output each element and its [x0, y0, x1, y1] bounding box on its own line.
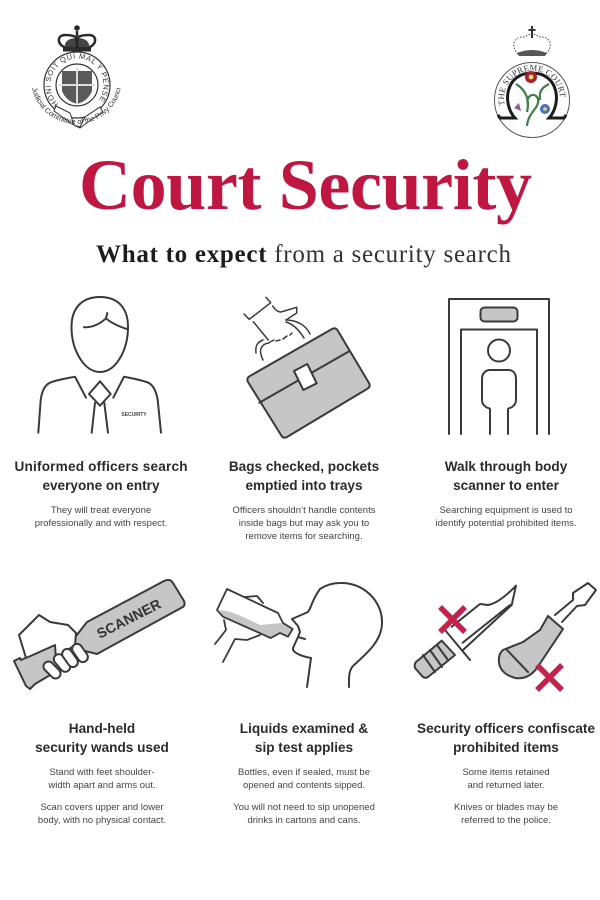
body text: and returned later. — [467, 780, 545, 791]
body text: remove items for searching. — [245, 531, 363, 542]
body text: inside bags but may ask you to — [239, 518, 369, 529]
icon: person drinking from bottle — [215, 583, 382, 687]
body text: identify potential prohibited items. — [436, 518, 576, 529]
heading: Liquids examined & — [240, 721, 368, 736]
icon: hand holding scanner wand — [14, 580, 185, 689]
heading: Hand-held — [69, 721, 135, 736]
heading: scanner to enter — [453, 478, 560, 493]
body text: professionally and with respect. — [35, 518, 167, 529]
heading: emptied into trays — [245, 478, 363, 493]
body text: body, with no physical contact. — [38, 815, 166, 826]
icon: hand holding scanner wand: SCANNER — [94, 596, 164, 642]
body text: They will treat everyone — [51, 505, 151, 516]
heading: Bags checked, pockets — [229, 459, 379, 474]
heading: Uniformed officers search — [14, 459, 188, 474]
panel: bags checked — [229, 297, 379, 542]
logo: Judicial Committee of the Privy Council: HONI SOIT QUI MAL Y PENSE — [45, 53, 109, 107]
body text: Knives or blades may be — [454, 802, 558, 813]
panel: prohibited items — [415, 583, 596, 826]
heading: Walk through body — [445, 459, 568, 474]
logo: Judicial Committee of the Privy Council — [32, 25, 121, 129]
icon: hand over briefcase — [244, 297, 370, 438]
body text: Some items retained — [462, 767, 550, 778]
body text: Searching equipment is used to — [439, 505, 573, 516]
body text: Bottles, even if sealed, must be — [238, 767, 370, 778]
body text: opened and contents sipped. — [243, 780, 365, 791]
body text: You will not need to sip unopened — [233, 802, 375, 813]
body text: Officers shouldn’t handle contents — [233, 505, 376, 516]
heading: sip test applies — [255, 740, 353, 755]
heading: prohibited items — [453, 740, 559, 755]
panel: hand-held wands — [14, 580, 185, 826]
logo: The Supreme Court — [494, 26, 570, 138]
heading: everyone on entry — [42, 478, 160, 493]
heading: security wands used — [35, 740, 169, 755]
icon: walk-through scanner — [449, 299, 549, 434]
body text: width apart and arms out. — [47, 780, 156, 791]
subtitle: What to expect from a security search — [96, 241, 512, 268]
body text: drinks in cartons and cans. — [247, 815, 361, 826]
title: Court Security — [79, 145, 532, 225]
panel: body scanner — [436, 299, 576, 529]
icon: knife and screwdriver with crosses — [415, 583, 596, 690]
body text: Stand with feet shoulder- — [49, 767, 155, 778]
panel: liquids — [215, 583, 382, 826]
icon: security officer — [38, 297, 161, 433]
logo: The Supreme Court: THE SUPREME COURT — [498, 64, 566, 106]
heading: Security officers confiscate — [417, 721, 595, 736]
body text: Scan covers upper and lower — [40, 802, 164, 813]
panel: uniformed officers — [14, 297, 188, 529]
icon: security officer: SECURITY — [121, 412, 147, 418]
body text: referred to the police. — [461, 815, 551, 826]
